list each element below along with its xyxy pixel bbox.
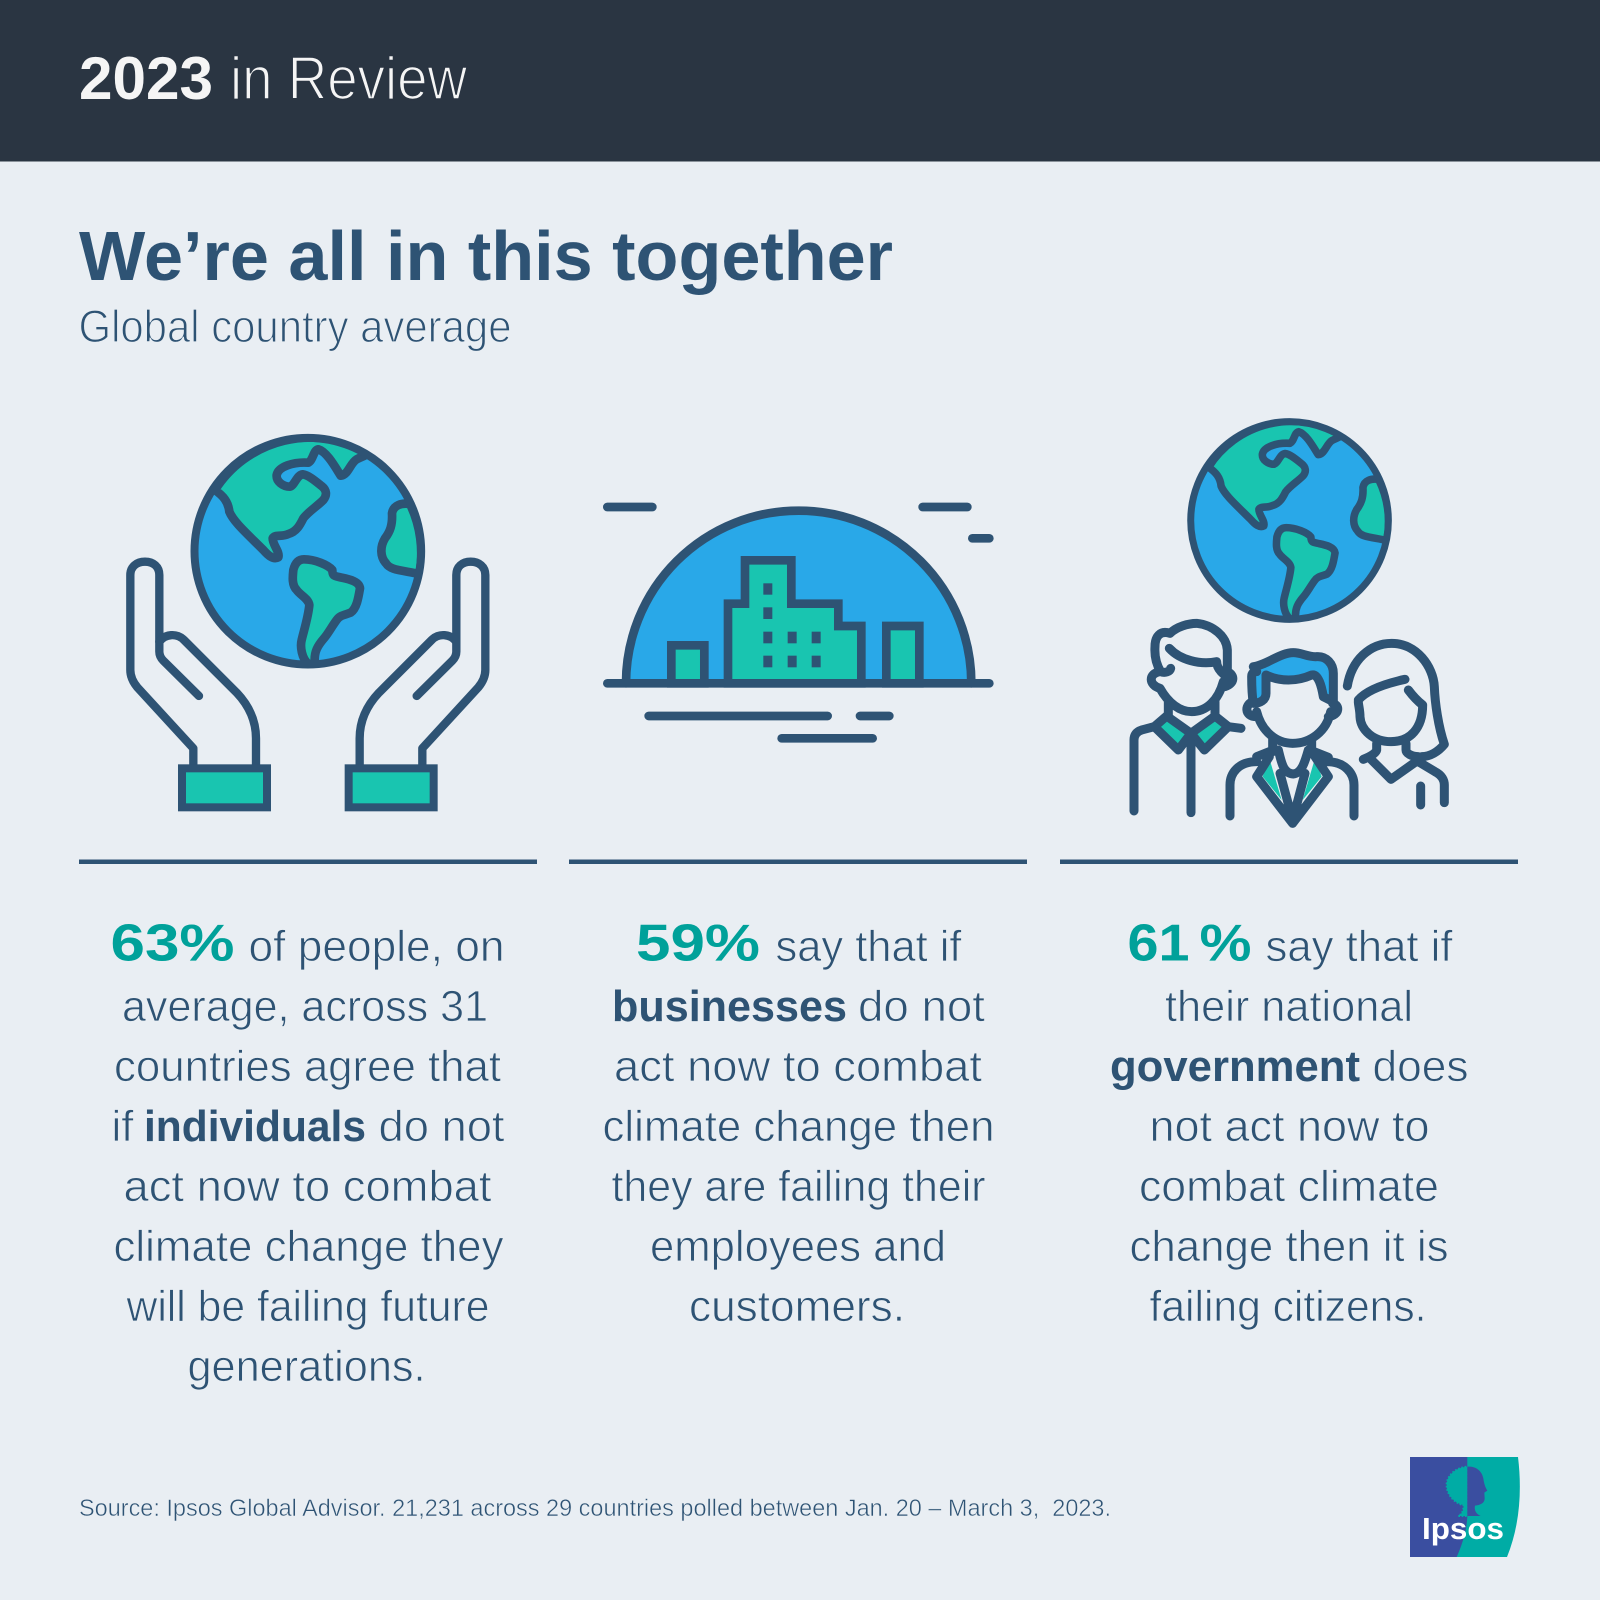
logo: Ipsos	[1410, 1457, 1520, 1557]
text block: businesses statistic: businesses	[612, 982, 847, 1031]
text block: businesses statistic: they are failing their	[612, 1162, 986, 1211]
text block: individuals statistic: will be failing future	[126, 1282, 490, 1331]
header title: 2023 in Review: in Review	[230, 45, 468, 112]
icon: globe above three people	[1134, 421, 1444, 823]
text block: individuals statistic: climate change they	[114, 1222, 504, 1271]
panel: government	[1060, 421, 1518, 1331]
text block: individuals statistic: if	[112, 1102, 134, 1151]
text block: businesses statistic: act now to combat	[614, 1042, 982, 1091]
text block: government statistic: say that if	[1266, 922, 1453, 971]
text block: individuals statistic	[110, 914, 504, 1391]
text block: individuals statistic: do not	[378, 1102, 504, 1151]
text block: government statistic: combat climate	[1139, 1162, 1439, 1211]
middle man	[1230, 653, 1354, 823]
header title: 2023 in Review: 2023	[79, 45, 213, 112]
text block: government statistic: government	[1110, 1042, 1360, 1091]
text block: government statistic: failing citizens.	[1150, 1282, 1426, 1331]
source note: Source: Ipsos Global Advisor. 21,231 across 29 countries polled between Jan. 20 – March 3, 2023.	[79, 1495, 1111, 1522]
text block: businesses statistic: employees and	[650, 1222, 946, 1271]
header bar	[0, 0, 1600, 162]
stat: 61%: 61	[1128, 914, 1190, 972]
text block: government statistic	[1110, 914, 1468, 1331]
icon: hands holding globe	[130, 438, 485, 807]
heading: We’re all in this together	[79, 217, 893, 295]
text block: individuals statistic: individuals	[144, 1102, 366, 1151]
stat: 61%	[1128, 914, 1252, 972]
left man	[1134, 623, 1241, 813]
stat: 63%: 63%	[110, 914, 234, 972]
text block: businesses statistic	[602, 914, 994, 1331]
text block: businesses statistic: customers.	[689, 1282, 905, 1331]
icon: globe	[1191, 421, 1388, 619]
panel: individuals	[79, 438, 537, 1391]
text block: individuals statistic: countries agree that	[114, 1042, 501, 1091]
icon: city under dome	[607, 507, 989, 738]
header title: 2023 in Review	[79, 45, 468, 112]
icon: three people	[1134, 623, 1444, 823]
text block: government statistic: not act now to	[1150, 1102, 1430, 1151]
text block: businesses statistic: say that if	[776, 922, 962, 971]
woman	[1347, 643, 1444, 805]
stat: 61%: %	[1200, 914, 1252, 972]
text block: government statistic: change then it is	[1130, 1222, 1448, 1271]
subheading: Global country average	[78, 301, 512, 352]
text block: individuals statistic: average, across 31	[122, 982, 488, 1031]
text block: individuals statistic: generations.	[188, 1342, 426, 1391]
panel: businesses	[569, 507, 1027, 1331]
text block: individuals statistic: of people, on	[248, 922, 504, 971]
text block: individuals statistic: act now to combat	[124, 1162, 492, 1211]
logo: Ipsos: Ipsos	[1422, 1511, 1504, 1546]
text block: government statistic: does	[1372, 1042, 1468, 1091]
text block: government statistic: their national	[1165, 982, 1413, 1031]
stat: 59%: 59%	[636, 914, 760, 972]
text block: businesses statistic: climate change then	[602, 1102, 994, 1151]
text block: businesses statistic: do not	[858, 982, 985, 1031]
